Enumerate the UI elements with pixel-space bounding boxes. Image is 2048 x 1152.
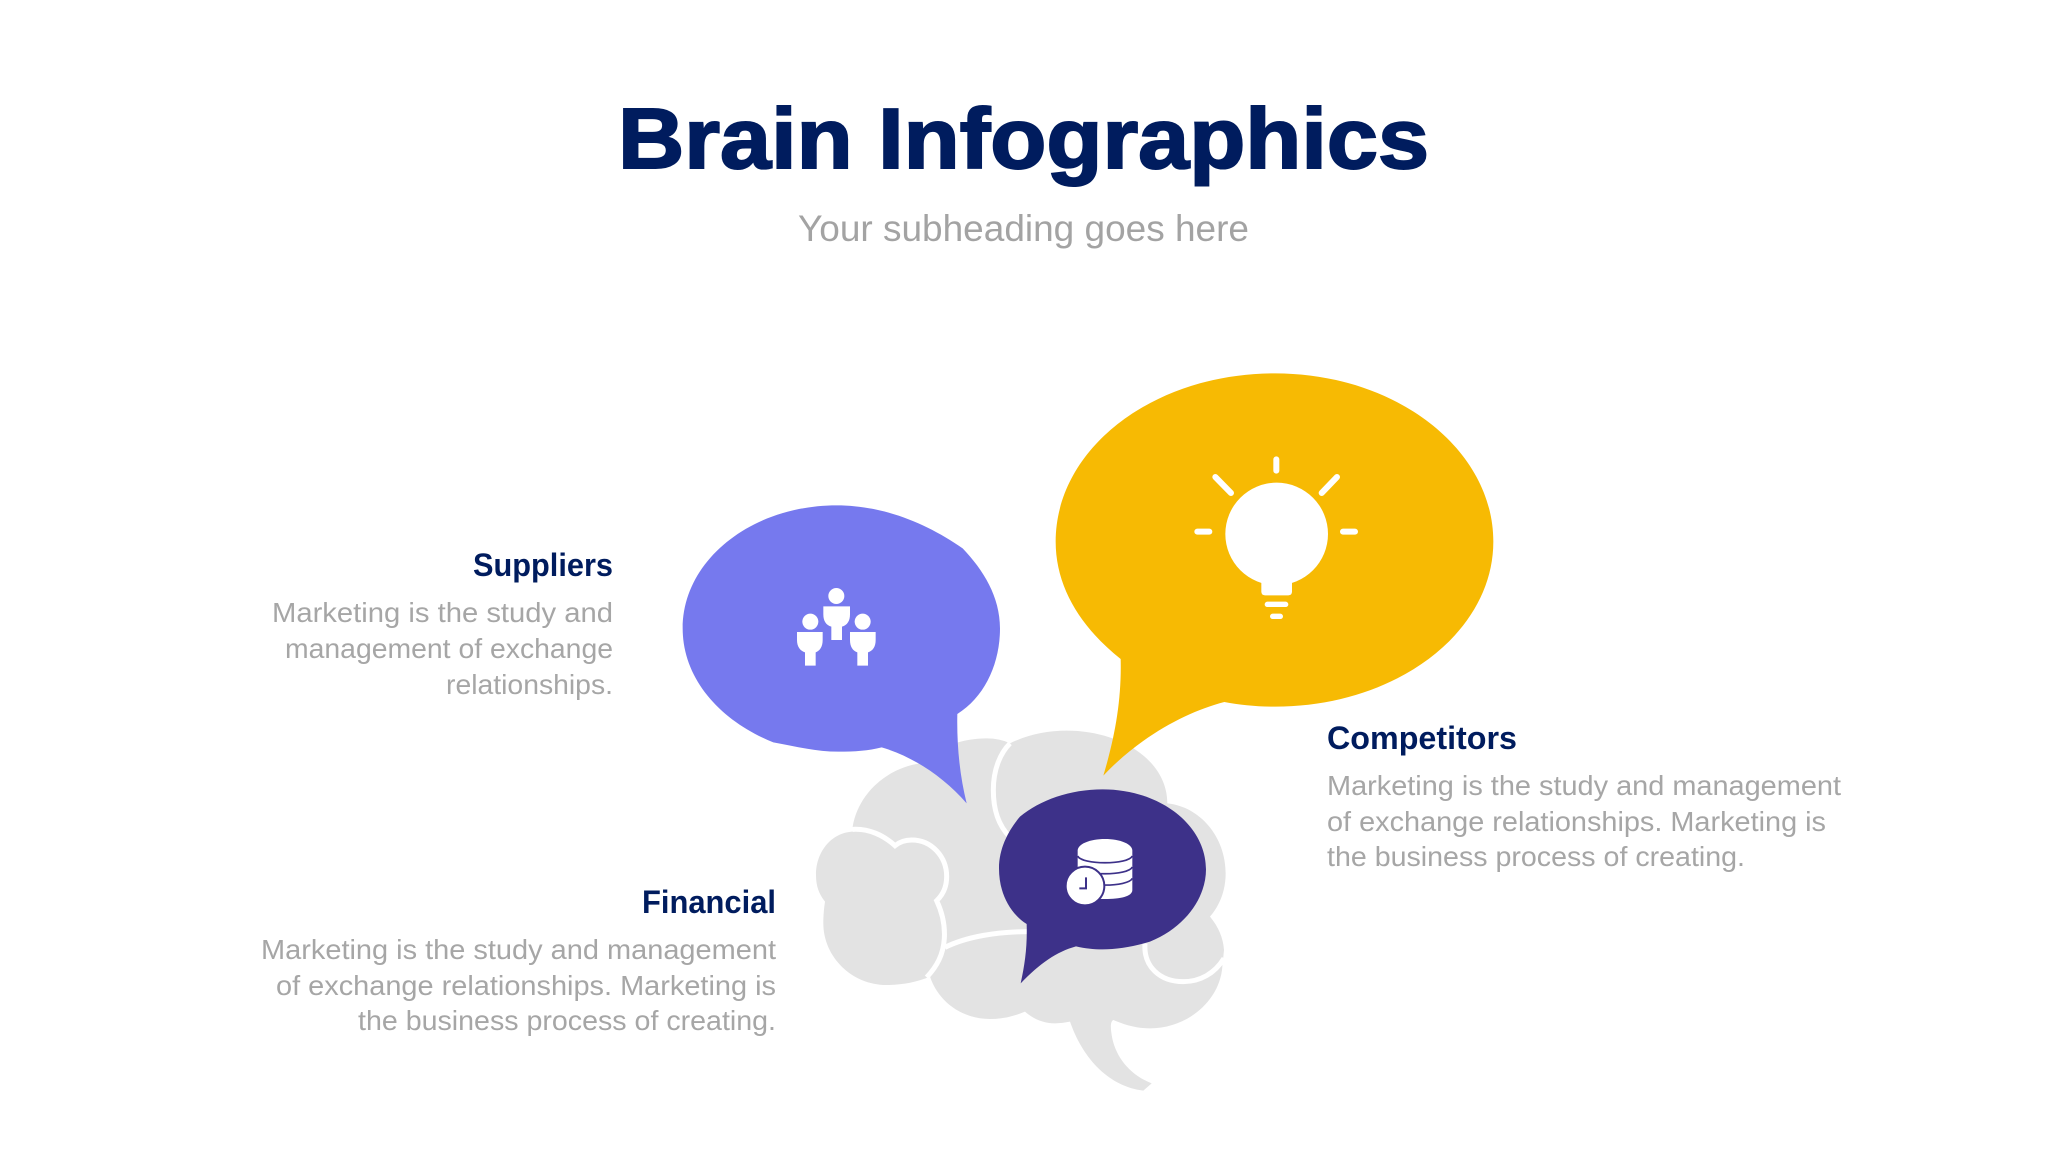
heading: suppliers: Suppliers (473, 547, 613, 583)
heading: financial: Financial (642, 884, 776, 920)
description: competitors: Marketing is the study and management (1327, 770, 1841, 801)
icon: people (797, 588, 876, 666)
description: suppliers: Marketing is the study and (272, 597, 613, 628)
brain illustration (816, 731, 1226, 1091)
text block: financial (261, 884, 776, 1036)
text block: competitors (1327, 720, 1841, 872)
description: competitors: of exchange relationships. Marketing is (1327, 806, 1826, 837)
description: suppliers (272, 597, 613, 700)
description: competitors (1327, 770, 1841, 872)
description: suppliers: management of exchange (285, 633, 613, 664)
speech bubble: financial (999, 789, 1206, 983)
description: competitors: the business process of creating. (1327, 841, 1745, 872)
subheading: Your subheading goes here (798, 208, 1249, 249)
heading: competitors: Competitors (1327, 720, 1517, 756)
description: financial: the business process of creating. (358, 1005, 776, 1036)
speech bubble: competitors (1056, 373, 1493, 776)
title: Brain Infographics (618, 92, 1429, 187)
icon: database with clock (1066, 839, 1132, 905)
icon: light bulb (1197, 459, 1355, 616)
text block: suppliers (272, 547, 613, 700)
speech bubble: suppliers (683, 505, 1000, 803)
description: financial (261, 934, 776, 1036)
description: financial: Marketing is the study and management (261, 934, 776, 965)
description: financial: of exchange relationships. Marketing is (276, 970, 776, 1001)
description: suppliers: relationships. (446, 669, 613, 700)
